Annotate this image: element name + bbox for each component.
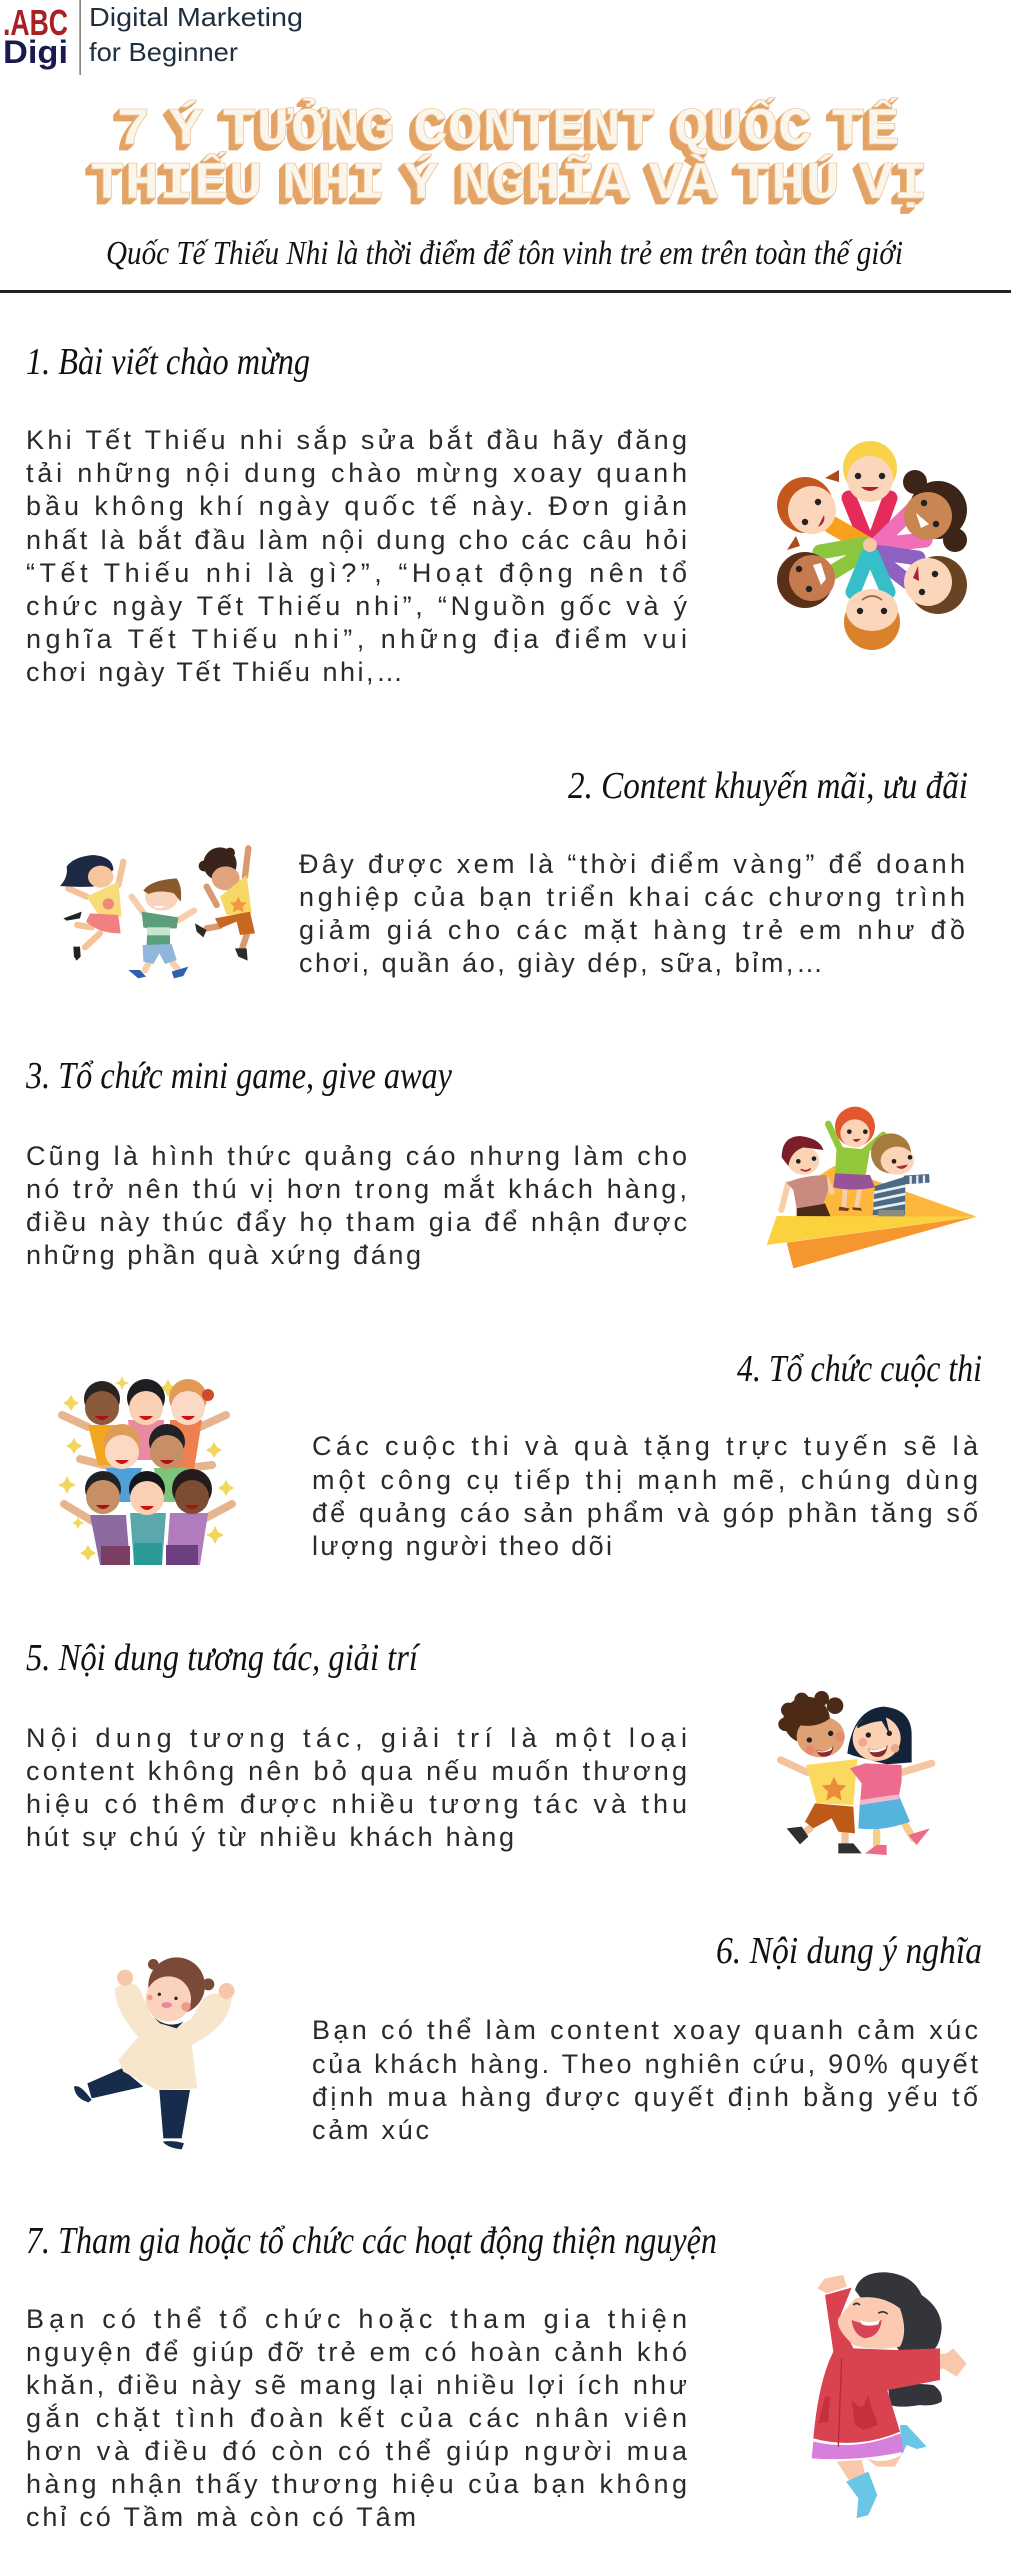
text block 1: “Tết Thiếu nhi là gì?”, “Hoạt động nên tổ: [26, 558, 687, 588]
title line 1: 7 Ý TƯỞNG CONTENT QUỐC TẾ: [116, 97, 900, 160]
text block 4: để quảng cáo sản phẩm và góp phần tăng số: [312, 1498, 978, 1528]
logo mark ABC: .ABC: [3, 2, 68, 43]
text block 4: [312, 1431, 979, 1561]
back row: [84, 1379, 214, 1470]
icon: crowd of cheering children: [58, 1376, 234, 1565]
right girl: [195, 847, 255, 961]
text block 2: [299, 849, 965, 978]
text block 1: nhất là bắt đầu làm nội dung cho các câu hỏi: [26, 524, 687, 555]
text block 3: điều này thúc đẩy họ tham gia để nhận được: [26, 1207, 687, 1237]
subtitle: Quốc Tế Thiếu Nhi là thời điểm để tôn vinh trẻ em trên toàn thế giới: [106, 235, 903, 272]
text block 6: định mua hàng được quyết định bằng yếu tố: [312, 2081, 978, 2112]
front row: [85, 1469, 212, 1565]
hands: [117, 1970, 133, 1986]
text block 2: giảm giá cho các mặt hàng trẻ em như đồ: [299, 915, 965, 945]
text block 7: khăn, điều này sẽ mang lại nhiều lợi ích như: [26, 2370, 687, 2400]
text block 4: một công cụ tiếp thị mạnh mẽ, chúng dùng: [312, 1465, 978, 1495]
text block 7: nguyện để giúp đỡ trẻ em có hoàn cảnh khó: [26, 2337, 687, 2367]
text block 3: nó trở nên thú vị hơn trong mắt khách hàng,: [26, 1173, 687, 1204]
text block 6: [312, 2015, 978, 2145]
heading 3: 3. Tổ chức mini game, give away: [25, 1055, 452, 1097]
text block 2: nghiệp của bạn triển khai các chương trình: [299, 882, 965, 912]
text block 1: Khi Tết Thiếu nhi sắp sửa bắt đầu hãy đăng: [26, 424, 687, 455]
logo mark Digi: Digi: [3, 34, 68, 70]
text block 6: Bạn có thể làm content xoay quanh cảm xúc: [312, 2015, 978, 2045]
text block 7: [26, 2304, 688, 2532]
top child: [843, 441, 897, 502]
paper plane front folds: [767, 1216, 977, 1268]
upper left child: [777, 470, 839, 550]
text block 3: những phần quà xứng đáng: [26, 1240, 421, 1270]
legs and boots: [837, 2455, 902, 2482]
paper plane back wing: [820, 1166, 977, 1217]
panel: section 5: [26, 1637, 932, 1855]
text block 7: hàng nhận thấy thương hiệu của bạn không: [26, 2469, 687, 2499]
sweater: [115, 1983, 232, 2090]
skirt: [812, 2433, 904, 2459]
icon: boy and girl hugging: [778, 1691, 932, 1855]
icon: ring of children: [777, 441, 967, 650]
text block 4: lượng người theo dõi: [312, 1531, 612, 1561]
girl: [847, 1707, 932, 1855]
text block 5: [26, 1723, 687, 1852]
logo: ABC Digi: [3, 0, 303, 75]
heading 1: 1. Bài viết chào mừng: [26, 341, 310, 383]
left girl: [60, 855, 123, 961]
text block 3: [26, 1141, 687, 1270]
pockets: [818, 2395, 878, 2430]
hands: [817, 2275, 967, 2377]
face: [838, 2297, 904, 2349]
left child: [781, 1136, 832, 1217]
middle child: [828, 1107, 883, 1211]
heading 7: 7. Tham gia hoặc tổ chức các hoạt động thiện nguyện: [26, 2220, 717, 2262]
middle boy: [128, 878, 194, 978]
logo tagline line 2: for Beginner: [89, 37, 238, 67]
text block 3: Cũng là hình thức quảng cáo nhưng làm cho: [26, 1141, 687, 1171]
text block 1: bầu không khí ngày quốc tế này. Đơn giản: [26, 491, 687, 521]
lower right child: [904, 556, 967, 614]
text block 6: của khách hàng. Theo nghiên cứu, 90% quyết: [312, 2049, 978, 2079]
text block 7: gắn chặt tình đoàn kết của các nhân viên: [26, 2402, 687, 2433]
text block 1: [26, 424, 688, 687]
icon: laughing girl in red coat: [812, 2272, 967, 2518]
text block 7: Bạn có thể tổ chức hoặc tham gia thiện: [26, 2304, 687, 2334]
title line 2: THIẾU NHI Ý NGHĨA VÀ THÚ VỊ: [90, 151, 928, 214]
text block 2: chơi, quần áo, giày dép, sữa, bỉm,…: [299, 948, 823, 978]
lower left child: [777, 552, 835, 608]
panel: section 2: [60, 765, 968, 978]
arms: [62, 1415, 232, 1522]
logo tagline line 1: Digital Marketing: [89, 2, 303, 32]
boy: [778, 1691, 862, 1853]
heading 5: 5. Nội dung tương tác, giải trí: [26, 1637, 421, 1679]
coat: [813, 2288, 940, 2443]
text block 6: cảm xúc: [312, 2115, 429, 2145]
panel: section 3: [25, 1055, 977, 1270]
text block 1: tải những nội dung chào mừng xoay quanh: [26, 458, 687, 488]
text block 5: hiệu có thêm được nhiều tương tác và thu: [26, 1789, 687, 1819]
panel: section 4: [58, 1348, 982, 1565]
icon: children on paper plane: [767, 1107, 977, 1268]
text block 5: Nội dung tương tác, giải trí là một loại: [26, 1723, 687, 1753]
hair: [855, 2272, 942, 2352]
legs: [87, 2068, 190, 2138]
text block 7: hơn và điều đó còn có thể giúp người mua: [26, 2436, 688, 2466]
right child: [871, 1133, 929, 1217]
bottom child: [844, 589, 900, 650]
panel: section 1: [26, 341, 967, 687]
heading 6: 6. Nội dung ý nghĩa: [716, 1930, 982, 1972]
head: [148, 1959, 159, 1970]
icon: three jumping children: [60, 847, 255, 978]
upper right child: [903, 470, 967, 552]
icon: dancing girl: [74, 1957, 235, 2149]
text block 7: chỉ có Tầm mà còn có Tâm: [26, 2502, 416, 2532]
text block 1: chức ngày Tết Thiếu nhi”, “Nguồn gốc và ý: [26, 591, 688, 621]
text block 1: chơi ngày Tết Thiếu nhi,…: [26, 657, 403, 687]
text block 4: Các cuộc thi và quà tặng trực tuyến sẽ là: [312, 1431, 979, 1461]
panel: section 6: [74, 1930, 982, 2149]
text block 2: Đây được xem là “thời điểm vàng” để doanh: [299, 849, 965, 879]
middle row: [104, 1424, 190, 1502]
text block 5: content không nên bỏ qua nếu muốn thương: [26, 1756, 687, 1786]
text block 5: hút sự chú ý từ nhiều khách hàng: [26, 1822, 514, 1852]
panel: section 7: [26, 2220, 967, 2532]
text block 1: nghĩa Tết Thiếu nhi”, những địa điểm vui: [26, 624, 687, 654]
title: [90, 97, 928, 214]
sparkles: [58, 1376, 234, 1561]
